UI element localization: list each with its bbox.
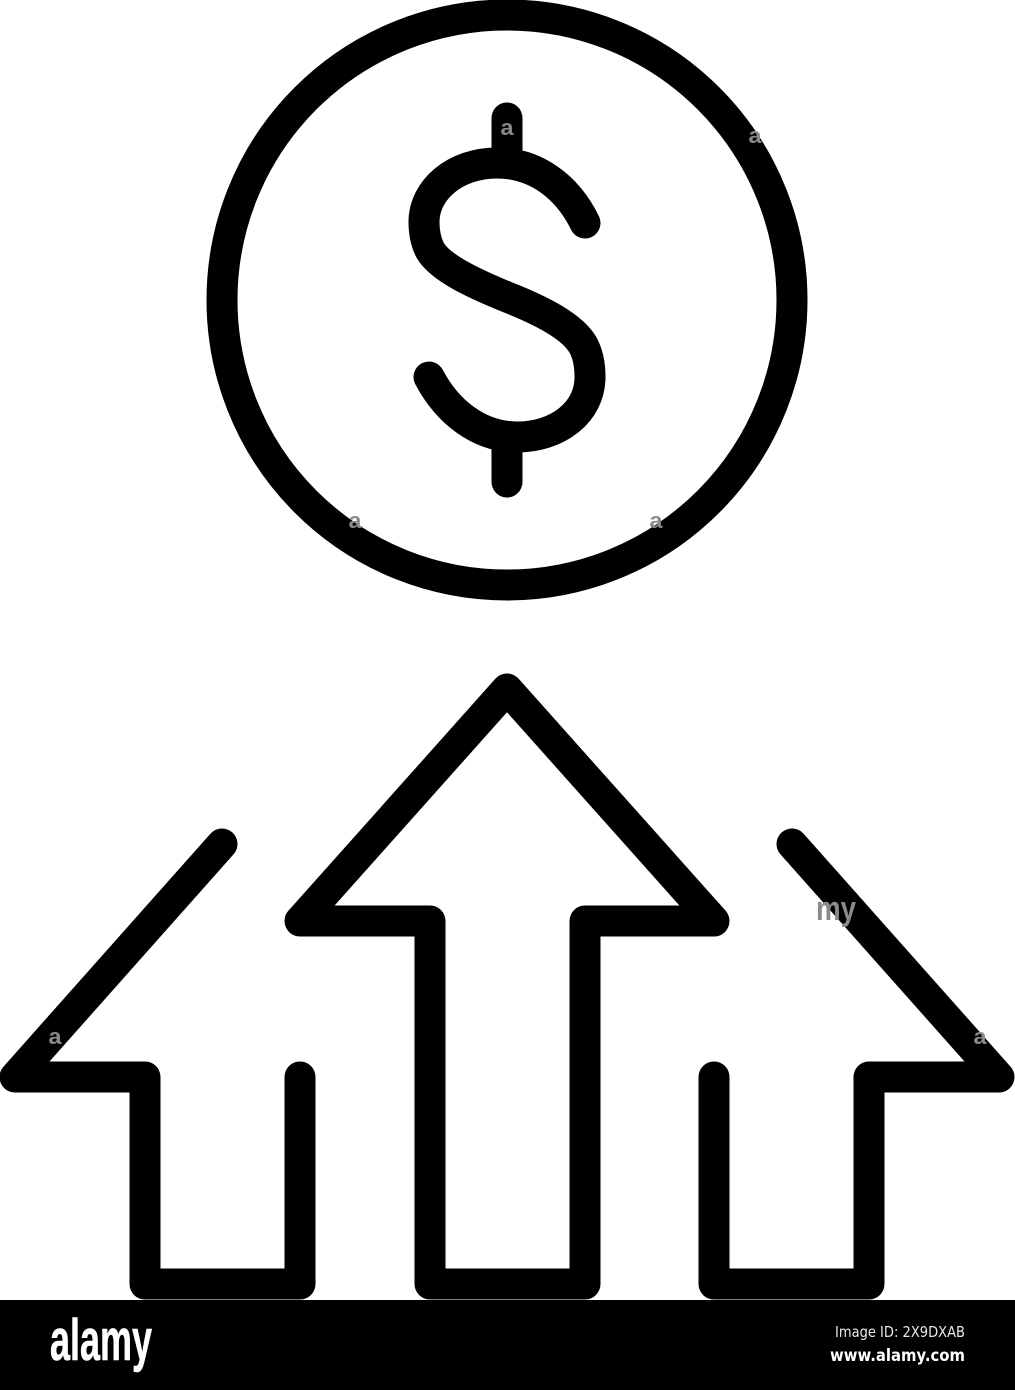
logo text: alamy [50,1308,152,1373]
icon: dollar coin [222,15,792,585]
footer bar [0,1300,1015,1390]
image id: Image ID: 2X9DXAB [835,1323,965,1341]
website: www.alamy.com [830,1346,965,1366]
coin circle [222,15,792,585]
dollar sign [424,118,590,482]
icon: left up arrow [15,844,300,1284]
icon: centre up arrow [300,689,714,1284]
watermark marks [48,115,987,1049]
watermark marks: a [48,1024,62,1049]
watermark marks: a [748,123,762,148]
watermark marks: a [974,1024,987,1049]
watermark marks: my [816,890,856,928]
watermark marks: a [650,508,663,533]
watermark marks: a [348,508,362,533]
icon: right up arrow [714,844,999,1284]
watermark marks: a [500,115,514,140]
